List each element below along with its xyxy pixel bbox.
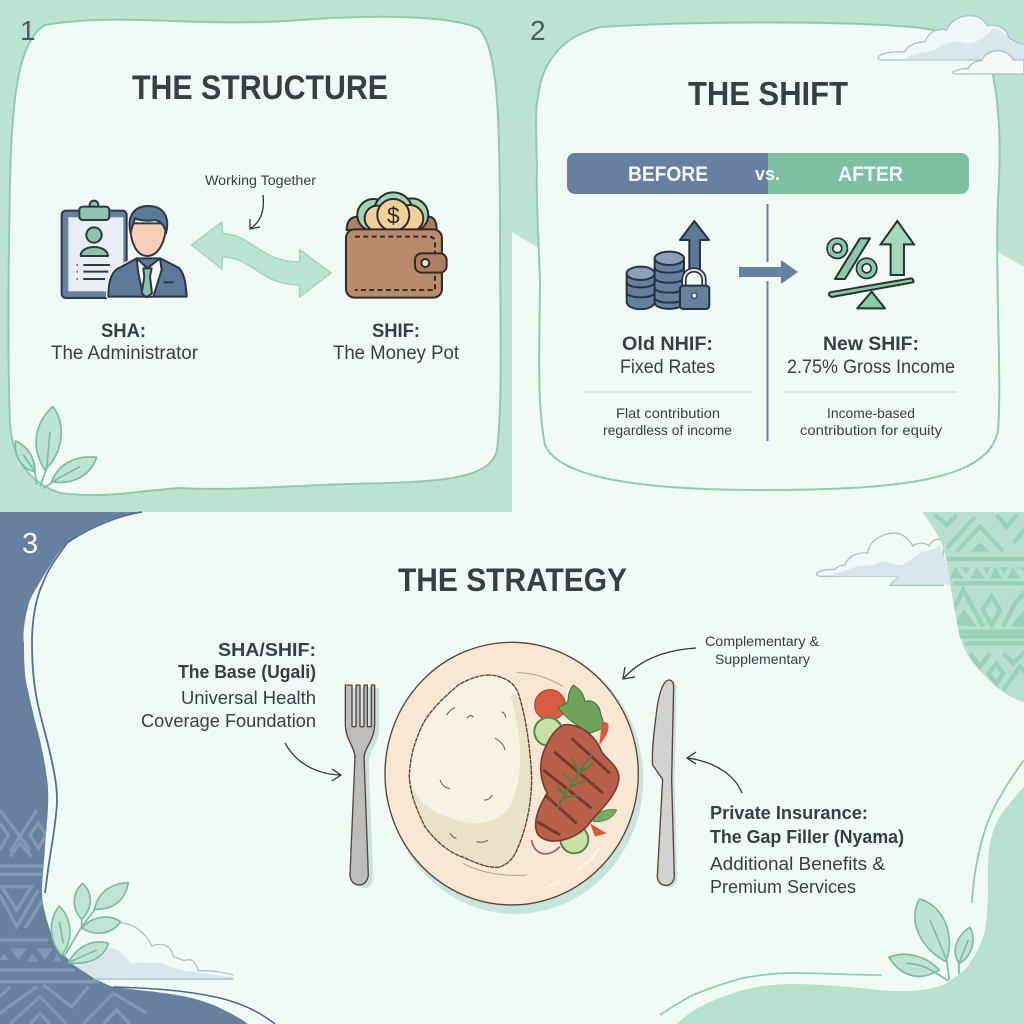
pattern: blue side band: [0, 512, 260, 1024]
label: SHIF the money pot: [333, 321, 460, 364]
before column text: Old NHIF:: [622, 334, 713, 355]
pattern: green corner band: [920, 512, 1024, 702]
label: SHIF the money pot: SHIF:: [372, 321, 420, 342]
plate well arcs: [463, 673, 563, 875]
before column text: [582, 334, 754, 438]
label: the base: Universal Health: [181, 687, 316, 708]
arrow: working together pointer: [250, 195, 263, 229]
plate shadow: [387, 644, 643, 914]
arrow: complementary to plate: [623, 648, 696, 679]
label: gap filler: Private Insurance:: [710, 802, 868, 823]
arrow: base to fork: [285, 743, 341, 781]
before column text: regardless of income: [603, 422, 732, 438]
label: the base: SHA/SHIF:: [218, 639, 316, 660]
heading: the structure: THE STRUCTURE: [132, 69, 388, 107]
before column text: Fixed Rates: [620, 357, 715, 378]
before vs after bar: AFTER: [838, 163, 903, 186]
icon: coins, lock and arrow: [627, 221, 709, 309]
arrow: gap filler to knife: [687, 752, 742, 793]
illustration: plate, fork and knife: [345, 642, 677, 914]
accent: lower blue outline: [113, 987, 275, 1024]
label: complementary: Supplementary: [715, 651, 810, 667]
icon: wallet with coins: [346, 192, 447, 298]
label: the base: [141, 639, 316, 731]
plate: [385, 642, 638, 905]
icon: percent scale and arrow: [829, 221, 914, 308]
label: SHA the administrator: The Administrator: [51, 343, 199, 364]
label: gap filler: [710, 802, 904, 897]
label: SHIF the money pot: The Money Pot: [333, 343, 460, 364]
label: working together: Working Together: [205, 173, 317, 188]
panel: the structure: [0, 0, 512, 512]
ugali: [409, 675, 532, 867]
arrow: before to after: [739, 260, 798, 284]
label: the base: Coverage Foundation: [141, 710, 316, 731]
icon: fork: [345, 685, 379, 888]
before column text: Flat contribution: [616, 405, 720, 421]
salad: [532, 685, 617, 854]
label: complementary: [705, 633, 820, 667]
number 3: 3: [22, 528, 38, 560]
label: gap filler: The Gap Filler (Nyama): [710, 826, 904, 847]
icon: leaves lower right: [889, 899, 973, 981]
label: gap filler: Premium Services: [710, 876, 856, 897]
panel: the strategy: [0, 512, 1024, 1024]
before vs after bar: BEFORE: [628, 163, 708, 186]
before vs after bar: [567, 153, 969, 194]
icon: administrator with clipboard: [62, 201, 187, 298]
icon: clouds top right: [878, 16, 1024, 74]
accent: upper blue outline: [32, 512, 142, 893]
after column text: New SHIF:: [823, 334, 919, 355]
label: gap filler: Additional Benefits &: [710, 853, 886, 874]
before vs after bar: vs.: [755, 164, 780, 184]
after column text: [785, 334, 957, 438]
panel number 1: 1: [20, 15, 36, 46]
icon: knife: [652, 680, 677, 887]
heading: the shift: THE SHIFT: [688, 75, 848, 112]
icon: wallet with coins: $: [387, 202, 400, 228]
label: SHA the administrator: [51, 321, 199, 364]
after column text: contribution for equity: [800, 422, 942, 438]
icon: leaves lower left with cloud: [51, 883, 233, 980]
heading: the strategy: THE STRATEGY: [398, 562, 627, 598]
divider: before and after: [766, 204, 768, 441]
icon: leaves panel 1: [15, 407, 97, 488]
icon: cloud top right: [817, 533, 953, 585]
panel number 2: 2: [530, 15, 546, 46]
shape: lower right green: [677, 787, 1024, 1024]
after column text: 2.75% Gross Income: [787, 357, 955, 378]
panel: the shift: [512, 0, 1024, 512]
plate highlight: [548, 847, 600, 887]
steak: [536, 725, 619, 841]
label: SHA the administrator: SHA:: [101, 321, 146, 342]
label: complementary: Complementary &: [705, 633, 820, 649]
accent: lower green line: [660, 973, 882, 1015]
label: the base: The Base (Ugali): [178, 661, 316, 682]
after column text: Income-based: [827, 405, 915, 421]
accent: green edge line: [972, 760, 1024, 903]
arrow: two-way link: [192, 222, 331, 297]
